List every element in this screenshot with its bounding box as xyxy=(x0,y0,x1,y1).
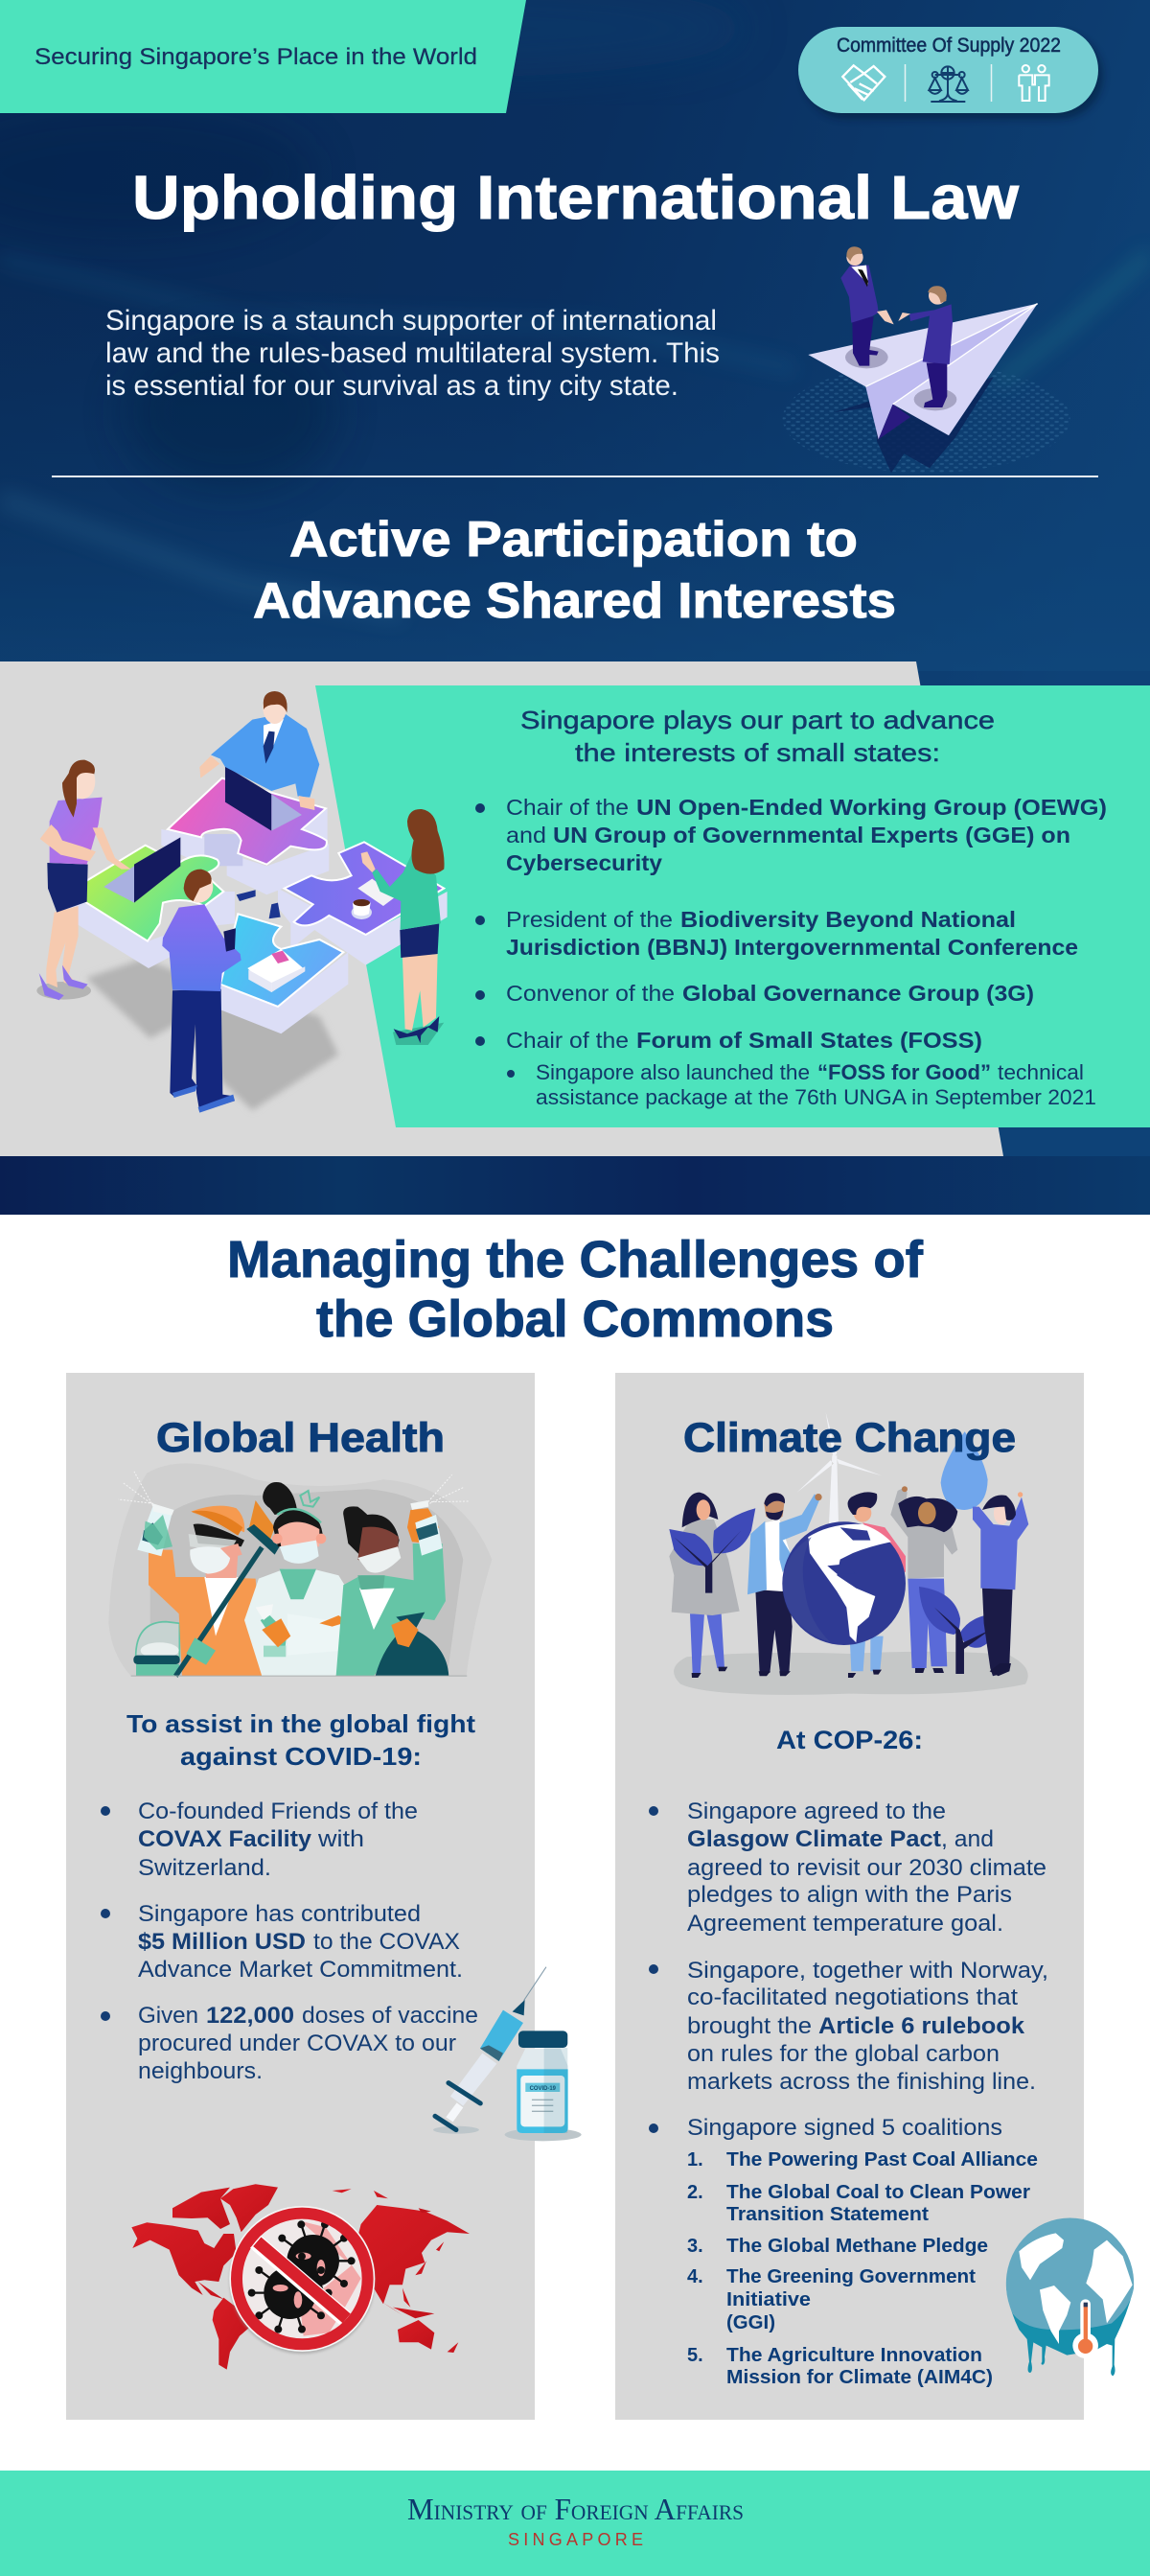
panel: climate change xyxy=(615,1373,1134,2420)
person: centre xyxy=(850,1636,884,1671)
person: right person xyxy=(982,1589,1013,1676)
list: five coalitions: The Agriculture Innovation xyxy=(726,2345,982,2366)
list: roles of Singapore: Singapore also launched the xyxy=(536,1060,810,1084)
subheading: global fight against COVID-19 xyxy=(126,1709,475,1771)
list: five coalitions: 5. xyxy=(687,2345,703,2366)
list: five coalitions: 1. xyxy=(687,2149,703,2170)
person: man in blue suit xyxy=(211,713,319,798)
list: roles of Singapore: Cybersecurity xyxy=(506,850,662,875)
banner: Securing Singapore's Place in the World xyxy=(0,0,526,113)
footer: Ministry of Foreign Affairs Singapore: SINGAPORE xyxy=(508,2530,643,2549)
subheading: global fight against COVID-19: against COVID-19: xyxy=(180,1742,422,1771)
list: five coalitions: The Global Methane Pledge xyxy=(726,2236,988,2257)
list: roles of Singapore: Chair of the xyxy=(506,1028,629,1053)
heading: Managing the Challenges of the Global Commons: Managing the Challenges of xyxy=(227,1231,924,1288)
list: COP-26 actions: Article 6 rulebook xyxy=(818,2013,1025,2039)
icon: melting globe with thermometer xyxy=(1006,2218,1134,2376)
list: roles of Singapore: Biodiversity Beyond National xyxy=(680,907,1016,932)
list: COVID-19 contributions: neighbours. xyxy=(138,2058,263,2084)
list: five coalitions: 4. xyxy=(687,2266,703,2287)
list: roles of Singapore: Jurisdiction (BBNJ) Intergovernmental Conference xyxy=(506,935,1078,960)
text block: introduction xyxy=(105,305,720,402)
list: COP-26 actions: Singapore signed 5 coalitions xyxy=(687,2115,1002,2141)
illustration: handshake on paper plane xyxy=(783,246,1070,473)
list: roles of Singapore: Chair of the xyxy=(506,795,629,820)
list: COVID-19 contributions: with xyxy=(317,1826,364,1852)
list: roles of Singapore xyxy=(475,795,1107,1109)
list: COP-26 actions: Singapore agreed to the xyxy=(687,1799,946,1824)
illustration: people holding globe and plants xyxy=(669,1412,1028,1695)
divider xyxy=(52,476,1098,477)
footer: Ministry of Foreign Affairs Singapore xyxy=(0,2471,1150,2576)
list: roles of Singapore: Global Governance Group (3G) xyxy=(682,981,1034,1006)
heading: Global Health: Global Health xyxy=(156,1415,445,1461)
dark blue hero background xyxy=(0,0,1150,1215)
list: COP-26 actions xyxy=(649,1799,1048,2141)
list: COVID-19 contributions: 122,000 xyxy=(206,2003,294,2029)
illustration: world map with no virus sign xyxy=(131,2184,470,2370)
list: COVID-19 contributions: Co-founded Friends of the xyxy=(138,1799,418,1824)
person: woman in green top xyxy=(402,954,438,1031)
list: roles of Singapore: “FOSS for Good” xyxy=(817,1060,991,1084)
list: COVID-19 contributions: to the COVAX xyxy=(313,1929,460,1955)
list: five coalitions: Mission for Climate (AIM4C) xyxy=(726,2367,993,2388)
illustration: people assembling puzzle xyxy=(36,691,448,1113)
icon: scales and globe xyxy=(929,66,968,102)
water drop xyxy=(941,1431,988,1510)
list: COVID-19 contributions: Advance Market Commitment. xyxy=(138,1957,463,1983)
person: bearded man xyxy=(755,1589,793,1673)
list: roles of Singapore: UN Open-Ended Working Group (OEWG) xyxy=(636,795,1107,820)
person: left woman xyxy=(690,1613,724,1673)
text block: introduction: is essential for our survival as a tiny city state. xyxy=(105,370,678,402)
list: five coalitions: The Global Coal to Clean Power xyxy=(726,2182,1030,2203)
text block: introduction: Singapore is a staunch supporter of international xyxy=(105,305,717,337)
heading: Managing the Challenges of the Global Commons: the Global Commons xyxy=(316,1290,834,1348)
badge: Committee Of Supply 2022 xyxy=(798,27,1103,119)
list: roles of Singapore: Convenor of the xyxy=(506,981,675,1006)
list: roles of Singapore: UN Group of Governmental Experts (GGE) on xyxy=(553,823,1070,847)
heading: advancing the interests of small states: the interests of small states: xyxy=(575,738,940,767)
puzzle items xyxy=(225,766,271,831)
list: COP-26 actions: , and xyxy=(941,1826,994,1852)
text block: introduction: law and the rules-based multilateral system. This xyxy=(105,337,720,369)
icon: syringe and vaccine vial xyxy=(433,1967,582,2141)
illustration: health workers xyxy=(108,1463,492,1677)
list: COVID-19 contributions: Given xyxy=(138,2003,198,2029)
list: COP-26 actions: Agreement temperature goal. xyxy=(687,1911,1003,1937)
list: roles of Singapore: assistance package at the 76th UNGA in September 2021 xyxy=(536,1085,1096,1109)
heading: advancing the interests of small states xyxy=(520,706,995,767)
heading: Climate Change: Climate Change xyxy=(683,1415,1016,1461)
list: COP-26 actions: co-facilitated negotiations that xyxy=(687,1984,1018,2010)
icon: syringe and vaccine vial: COVID-19 xyxy=(530,2085,556,2092)
list: COVID-19 contributions: procured under COVAX to our xyxy=(138,2031,456,2056)
list: five coalitions: (GGI) xyxy=(726,2312,775,2333)
list: COVID-19 contributions: doses of vaccine xyxy=(302,2003,478,2029)
list: COP-26 actions: markets across the finishing line. xyxy=(687,2069,1036,2095)
list: COP-26 actions: Singapore, together with Norway, xyxy=(687,1958,1048,1984)
list: COVID-19 contributions xyxy=(101,1799,478,2084)
list: COVID-19 contributions: Singapore has contributed xyxy=(138,1901,421,1927)
plant: right leaves xyxy=(919,1587,960,1635)
banner: Securing Singapore's Place in the World: Securing Singapore’s Place in the World xyxy=(34,44,477,70)
list: roles of Singapore: technical xyxy=(998,1060,1084,1084)
person: man with phone xyxy=(170,989,235,1112)
list: five coalitions xyxy=(687,2149,1038,2388)
list: COP-26 actions: Glasgow Climate Pact xyxy=(687,1826,941,1852)
person: woman in purple top xyxy=(46,906,79,987)
wind turbine xyxy=(797,1412,882,1524)
heading: Active Participation to Advance Shared Interests: Active Participation to xyxy=(289,512,858,568)
subheading: At COP-26: At COP-26: xyxy=(776,1726,923,1754)
list: COVID-19 contributions: $5 Million USD xyxy=(138,1929,306,1955)
person: woman with raised hand xyxy=(908,1579,947,1668)
title: Upholding International Law: Upholding International Law xyxy=(132,163,1019,232)
list: COP-26 actions: on rules for the global carbon xyxy=(687,2041,1000,2067)
list: roles of Singapore: Forum of Small States (FOSS) xyxy=(636,1028,982,1053)
icon: two people xyxy=(1019,65,1049,101)
list: five coalitions: 3. xyxy=(687,2236,703,2257)
list: COP-26 actions: pledges to align with the Paris xyxy=(687,1882,1012,1908)
list: COVID-19 contributions: COVAX Facility xyxy=(138,1826,312,1852)
list: COP-26 actions: brought the xyxy=(687,2013,812,2039)
list: five coalitions: 2. xyxy=(687,2182,703,2203)
panel: global health xyxy=(66,1373,582,2420)
list: COVID-19 contributions: Switzerland. xyxy=(138,1855,271,1881)
panel: active participation xyxy=(0,661,1150,1156)
list: five coalitions: Initiative xyxy=(726,2289,811,2310)
icon: handshake xyxy=(842,65,885,100)
footer: Ministry of Foreign Affairs Singapore: Ministry of Foreign Affairs xyxy=(407,2492,744,2526)
list: COP-26 actions: agreed to revisit our 2030 climate xyxy=(687,1855,1046,1881)
list: five coalitions: The Powering Past Coal Alliance xyxy=(726,2149,1038,2170)
badge: Committee Of Supply 2022: Committee Of Supply 2022 xyxy=(837,35,1061,57)
list: roles of Singapore: President of the xyxy=(506,907,673,932)
heading: Active Participation to Advance Shared Interests: Advance Shared Interests xyxy=(253,573,896,629)
list: five coalitions: Transition Statement xyxy=(726,2204,929,2225)
illustration: globe xyxy=(782,1521,906,1645)
heading: Active Participation to Advance Shared Interests xyxy=(253,512,896,629)
list: roles of Singapore: and xyxy=(506,823,546,847)
list: five coalitions: The Greening Government xyxy=(726,2266,976,2287)
heading: advancing the interests of small states: Singapore plays our part to advance xyxy=(520,706,995,734)
subheading: global fight against COVID-19: To assist in the global fight xyxy=(126,1709,475,1738)
heading: Managing the Challenges of the Global Commons xyxy=(227,1231,924,1348)
